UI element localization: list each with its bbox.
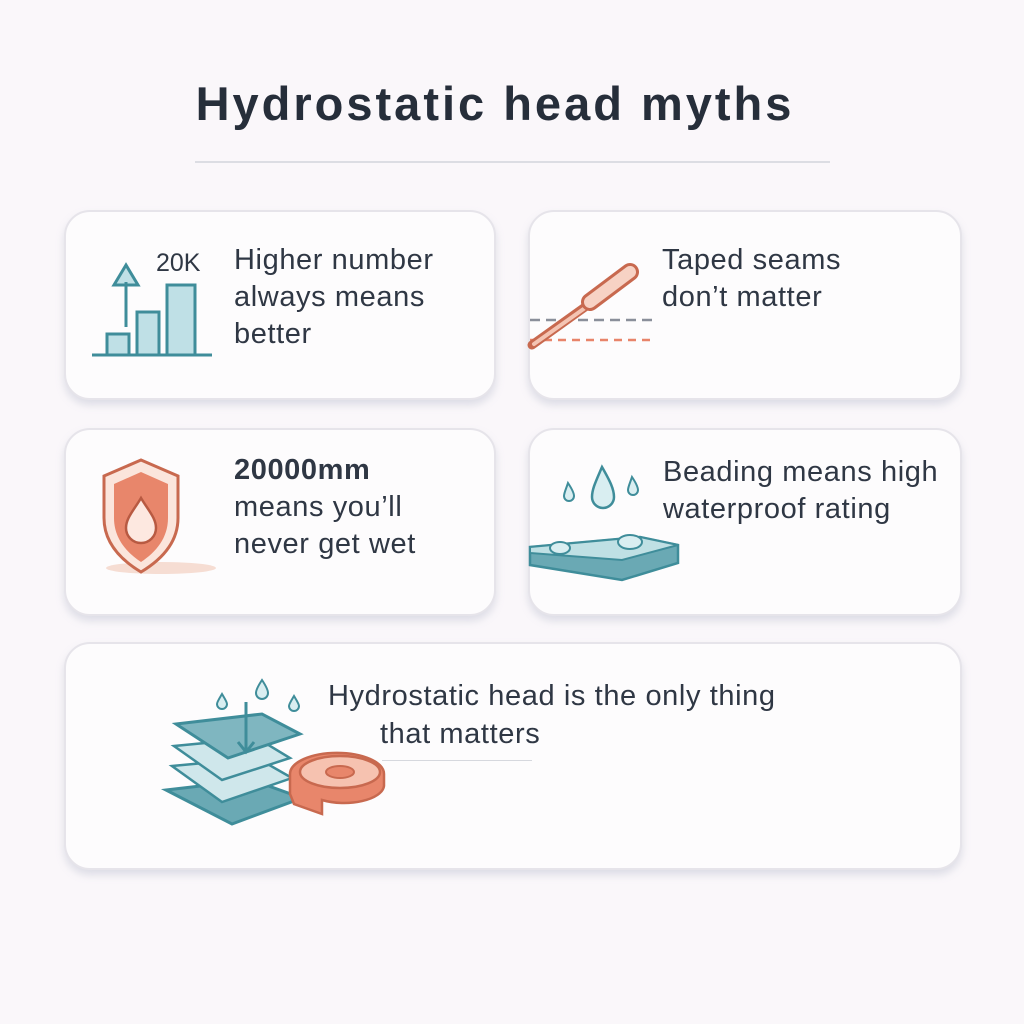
text xyxy=(662,244,841,313)
icon: shield with drop xyxy=(102,458,216,574)
icon: seam tape roller xyxy=(528,263,652,350)
text: waterproof rating xyxy=(663,493,891,525)
panel: taped seams xyxy=(528,210,962,400)
text: means you’ll xyxy=(234,491,402,523)
text: Beading means high xyxy=(663,456,938,488)
panel: hydrostatic head only xyxy=(64,642,962,870)
text: 20000mm xyxy=(234,454,370,486)
text: better xyxy=(234,318,312,350)
text: don’t matter xyxy=(662,281,822,313)
label: 20K: 20K xyxy=(156,249,200,277)
text: Higher number xyxy=(234,244,434,276)
text: always means xyxy=(234,281,425,313)
panel: beading xyxy=(528,428,962,616)
text xyxy=(663,456,938,525)
panel: 20000mm xyxy=(64,428,496,616)
title: Hydrostatic head myths xyxy=(196,77,794,130)
panel: higher number xyxy=(64,210,496,400)
text xyxy=(234,244,434,350)
icon: beading fabric xyxy=(528,464,680,582)
text: Hydrostatic head is the only thing xyxy=(328,680,776,712)
icon: fabric layers with tape xyxy=(161,678,386,826)
icon: bar chart with arrow xyxy=(92,262,212,356)
text xyxy=(234,454,416,560)
text: never get wet xyxy=(234,528,416,560)
text: Taped seams xyxy=(662,244,841,276)
panel: hydrostatic head only: that matters xyxy=(380,718,540,750)
